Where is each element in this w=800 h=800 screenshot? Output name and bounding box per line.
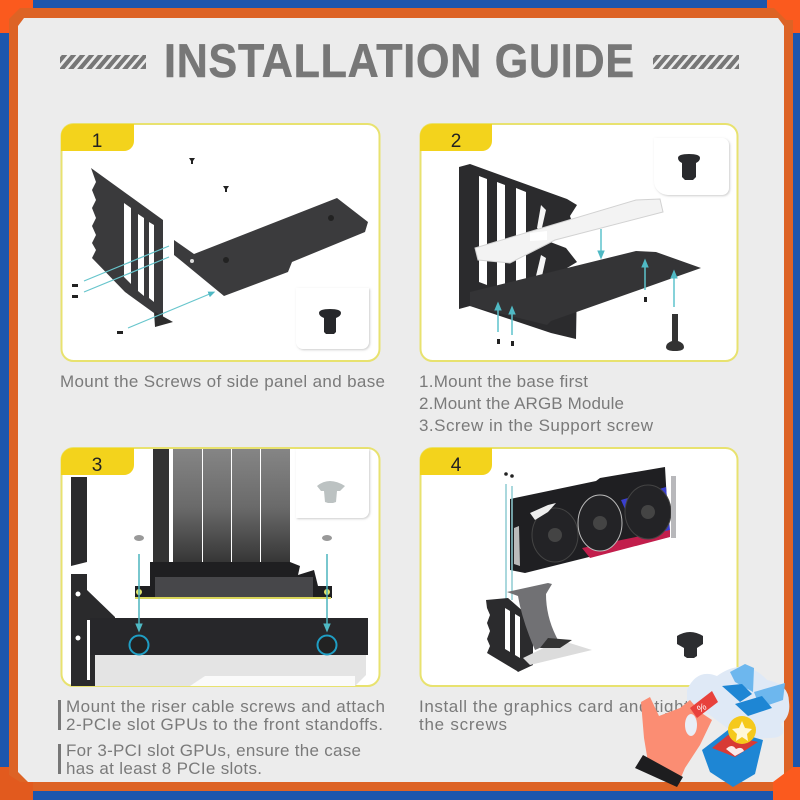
standoff circles [130, 636, 336, 654]
panel: step 2 [420, 124, 738, 361]
caption: step 2: 1.Mount the base first [419, 372, 588, 391]
caption: step 1: Mount the Screws of side panel and base [60, 372, 385, 391]
caption: step 3: For 3-PCI slot GPUs, ensure the case [66, 741, 361, 760]
cloud [687, 667, 789, 740]
side panel bracket [91, 168, 163, 327]
panel: step 4 [420, 448, 738, 686]
caption: step 4: the screws [419, 715, 507, 734]
base plate [90, 618, 368, 655]
base plate [174, 198, 368, 296]
caption: step 3 [58, 697, 385, 778]
white GPU edge [95, 655, 366, 686]
arrows [498, 229, 674, 335]
support screw [666, 314, 684, 351]
step 3 badge [61, 448, 134, 476]
riser assembly [486, 583, 592, 672]
caption: step 4 [419, 697, 709, 734]
screw inset [296, 288, 369, 349]
caption: step 4: Install the graphics card and tighten [419, 697, 709, 716]
caption: step 2: 3.Screw in the Support screw [419, 416, 654, 435]
arrows [139, 554, 327, 628]
step 3 badge: 3 [92, 455, 102, 476]
riser ribbon cable [153, 449, 290, 565]
step 4 badge [420, 448, 492, 476]
step 2 badge [420, 124, 492, 152]
caption: step 2: 2.Mount the ARGB Module [419, 394, 624, 413]
side bracket [71, 477, 115, 686]
screw inset [296, 449, 369, 518]
gift box interior [712, 735, 758, 757]
price tag [690, 691, 718, 718]
arrows [84, 246, 212, 328]
step 2 badge: 2 [451, 131, 461, 152]
decorative stripes left [60, 55, 146, 69]
caption: step 3: 2-PCIe slot GPUs to the front standoffs. [66, 715, 383, 734]
small screws [504, 472, 514, 478]
ARGB module [475, 199, 663, 263]
cuff [635, 755, 683, 787]
caption: step 2 [419, 372, 654, 435]
base plate [470, 251, 701, 325]
screws [72, 158, 229, 334]
screw inset [654, 138, 729, 195]
panel: step 3 [61, 448, 380, 686]
step 1 badge [61, 124, 134, 152]
star [732, 721, 752, 741]
small screws [134, 535, 332, 541]
heading text: INSTALLATION GUIDE [164, 34, 634, 87]
alignment lines [506, 484, 512, 600]
decorative stripes right [653, 55, 739, 69]
gift bow [722, 664, 785, 716]
caption: step 3: Mount the riser cable screws and attach [66, 697, 385, 716]
coin [728, 716, 756, 744]
small screws [497, 297, 647, 346]
bracket [459, 164, 577, 339]
step 1 badge: 1 [92, 131, 102, 152]
graphics card [510, 467, 676, 573]
caption: step 3: has at least 8 PCIe slots. [66, 759, 262, 778]
gift box [702, 730, 763, 787]
price tag: % [695, 701, 709, 715]
panel: step 1 [61, 124, 380, 361]
sticker: gift and hand [635, 664, 789, 787]
screw inset [656, 618, 729, 675]
hand [641, 697, 712, 782]
title [60, 34, 739, 87]
PCIe connector [135, 562, 332, 599]
step 4 badge: 4 [451, 455, 462, 476]
